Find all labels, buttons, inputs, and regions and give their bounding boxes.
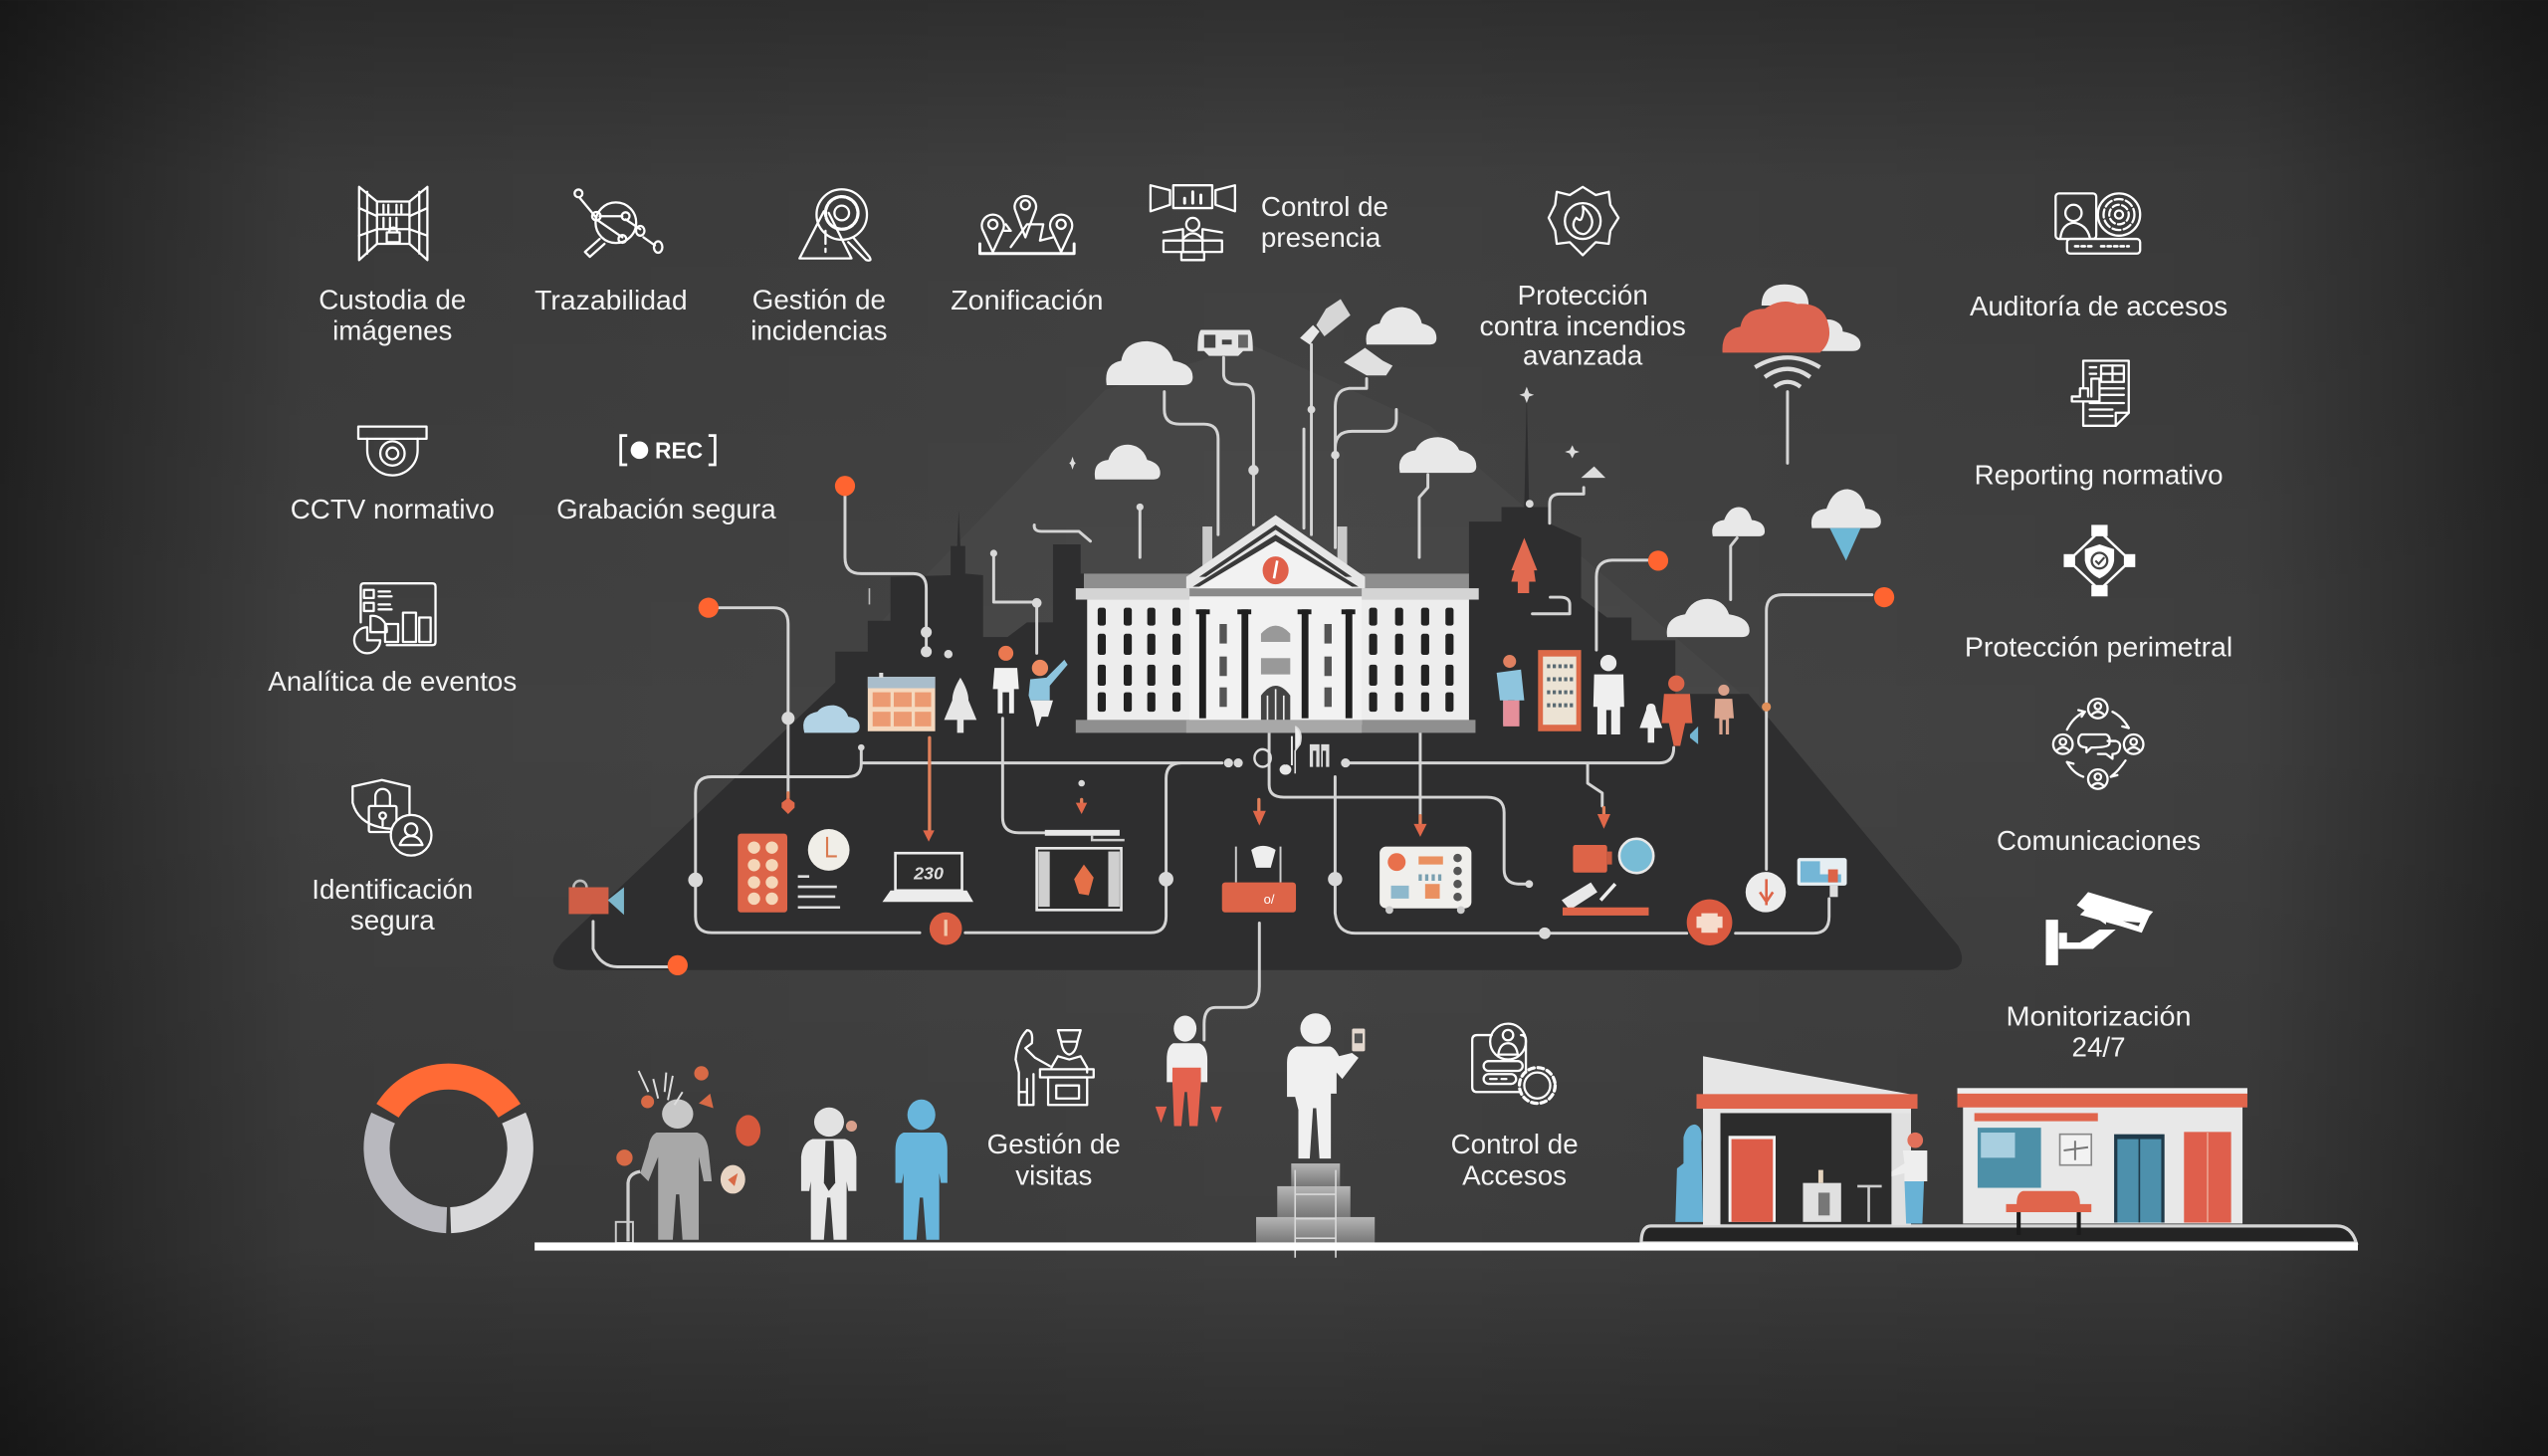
label: Comunicaciones xyxy=(1997,825,2201,856)
roof xyxy=(1084,573,1469,590)
person: woman with blue shirt xyxy=(1497,655,1524,727)
icon: comunicaciones xyxy=(2053,699,2143,789)
icon: screen device xyxy=(1037,833,1125,910)
person: old man with cane and worries xyxy=(616,1066,760,1243)
icon: rec badge xyxy=(621,436,715,465)
building chimneys xyxy=(1202,526,1347,569)
icon: red router: o/ xyxy=(1264,892,1275,907)
person: receptionist xyxy=(1891,1133,1927,1223)
wire group: top sky xyxy=(1165,344,1788,650)
icon: trazabilidad xyxy=(574,189,662,257)
icon: custodia de imagenes xyxy=(359,187,427,260)
label: Reporting normativo xyxy=(1975,460,2224,491)
pediment xyxy=(1186,516,1365,588)
base xyxy=(1076,720,1475,732)
right building xyxy=(1958,1088,2247,1235)
portico xyxy=(1189,588,1362,725)
label: presencia xyxy=(1261,222,1381,253)
label: Auditoría de accesos xyxy=(1970,291,2228,321)
wire group: centre right bus xyxy=(1204,595,1872,1040)
icon: orange keypad xyxy=(738,834,787,913)
icon: laptop: 230 xyxy=(913,863,944,883)
portico windows and door xyxy=(1219,624,1332,720)
label: Custodia de xyxy=(318,284,466,314)
icon: small dome camera xyxy=(1344,347,1392,375)
windows xyxy=(1098,608,1453,712)
left building xyxy=(1675,1056,1927,1225)
panel: access buildings xyxy=(1641,1056,2356,1243)
label: imágenes xyxy=(332,314,452,345)
wings xyxy=(1087,600,1469,722)
centre symbols on bus xyxy=(1254,727,1330,774)
label: Gestión de xyxy=(987,1129,1121,1159)
icon: red camera and magnifier xyxy=(1562,839,1653,916)
icon: bus xyxy=(1197,330,1253,356)
icon: proteccion contra incendios xyxy=(1549,187,1618,255)
panel: network wiring xyxy=(593,344,1894,1040)
label: avanzada xyxy=(1523,339,1643,370)
label: contra incendios xyxy=(1480,311,1686,341)
entablature xyxy=(1189,588,1362,596)
icon: white compass circle xyxy=(1746,872,1786,913)
label: Protección perimetral xyxy=(1965,632,2232,663)
icon: proteccion perimetral xyxy=(2063,524,2135,596)
label: segura xyxy=(350,905,435,936)
panel: left street figures xyxy=(803,588,1068,732)
icon: control de accesos xyxy=(1472,1024,1555,1104)
icon: orange alert circle xyxy=(930,913,962,944)
label: incidencias xyxy=(750,314,888,345)
person: blue at doorway xyxy=(1675,1125,1703,1222)
clouds xyxy=(1095,308,1881,637)
panel: bottom figures xyxy=(616,1013,1375,1258)
label: Identificación xyxy=(312,874,473,905)
icon: identificacion segura xyxy=(352,780,431,856)
icon: cctv normativo xyxy=(358,427,427,476)
wire nodes xyxy=(688,406,1771,939)
icon: analitica de eventos xyxy=(354,583,436,653)
label: CCTV normativo xyxy=(291,494,495,524)
bench xyxy=(2007,1191,2091,1235)
icon: control de presencia xyxy=(1151,185,1235,260)
person: standing adult xyxy=(993,646,1019,714)
cornice xyxy=(1076,588,1479,600)
label: Grabación segura xyxy=(556,494,776,524)
icon: auditoria de accesos xyxy=(2055,193,2140,254)
person: red trousers xyxy=(1156,1015,1222,1127)
label: Protección xyxy=(1518,280,1648,311)
person: man in suit xyxy=(801,1108,857,1240)
icon: film camera xyxy=(568,881,624,915)
icon: gestion de incidencias xyxy=(799,189,871,261)
label: Analítica de eventos xyxy=(268,666,517,697)
icon: sparks and plane xyxy=(1069,387,1605,478)
icon: laptop xyxy=(883,853,973,902)
person: small blue figure xyxy=(1690,727,1698,744)
person: white man xyxy=(1593,655,1624,734)
wire group: main bus xyxy=(696,747,1674,933)
label: Control de xyxy=(1451,1129,1579,1159)
icon: orange bookshelf xyxy=(1538,650,1582,731)
icon: red wifi cloud xyxy=(1722,285,1860,387)
person: blue xyxy=(896,1100,948,1240)
icon: house xyxy=(868,673,936,731)
person: small white figure xyxy=(1639,704,1662,742)
columns xyxy=(1196,609,1356,719)
panel: main building xyxy=(1076,516,1479,732)
orange arrowheads xyxy=(781,798,1610,842)
label: Gestión de xyxy=(752,284,886,314)
panel: city mountain backdrop xyxy=(553,344,1962,970)
pedestal xyxy=(1256,1163,1375,1258)
wire group: orange feeds xyxy=(788,737,1603,832)
panel: equipment row xyxy=(568,829,1847,945)
orange endpoint dots xyxy=(668,476,1894,975)
icon: gestion de visitas xyxy=(1015,1030,1094,1105)
icon: ice cone under cloud xyxy=(1829,528,1860,560)
icon: red cross circle xyxy=(1687,900,1732,945)
label: Accesos xyxy=(1462,1159,1567,1190)
icon: tilted camera xyxy=(1300,299,1351,344)
icon: blue card device xyxy=(1798,858,1847,897)
icon: lamp xyxy=(868,588,870,604)
label: Zonificación xyxy=(951,285,1104,315)
label: Control de xyxy=(1261,191,1388,222)
icon: red arrow tower xyxy=(1511,537,1537,593)
panel: right street figures xyxy=(1497,650,1734,745)
icon: text lines xyxy=(798,877,840,908)
ground line xyxy=(534,1242,2358,1251)
wire group: upper left xyxy=(593,486,1140,967)
icon: control panel xyxy=(1380,847,1471,914)
icon: donut ring xyxy=(376,1077,521,1220)
icon: red router xyxy=(1222,846,1296,913)
person: with phone xyxy=(1287,1013,1365,1158)
icon: sky devices xyxy=(1069,299,1605,478)
icon: clock xyxy=(808,829,850,871)
person: girl waving xyxy=(1028,660,1068,727)
person: red figure xyxy=(1661,676,1692,745)
icon: blue cloud xyxy=(803,706,860,732)
icon: zonificacion xyxy=(979,196,1074,254)
label: Trazabilidad xyxy=(534,285,688,315)
label: Monitorización xyxy=(2007,1000,2192,1031)
label: visitas xyxy=(1015,1159,1092,1190)
icon: reporting normativo xyxy=(2072,361,2129,426)
icon: monitorizacion camera xyxy=(2046,892,2153,965)
person: peach figure xyxy=(1714,685,1734,734)
platform xyxy=(1641,1226,2356,1243)
label: 24/7 xyxy=(2072,1031,2126,1062)
icon: tree xyxy=(945,678,976,732)
icon: rec badge: REC xyxy=(655,437,703,463)
